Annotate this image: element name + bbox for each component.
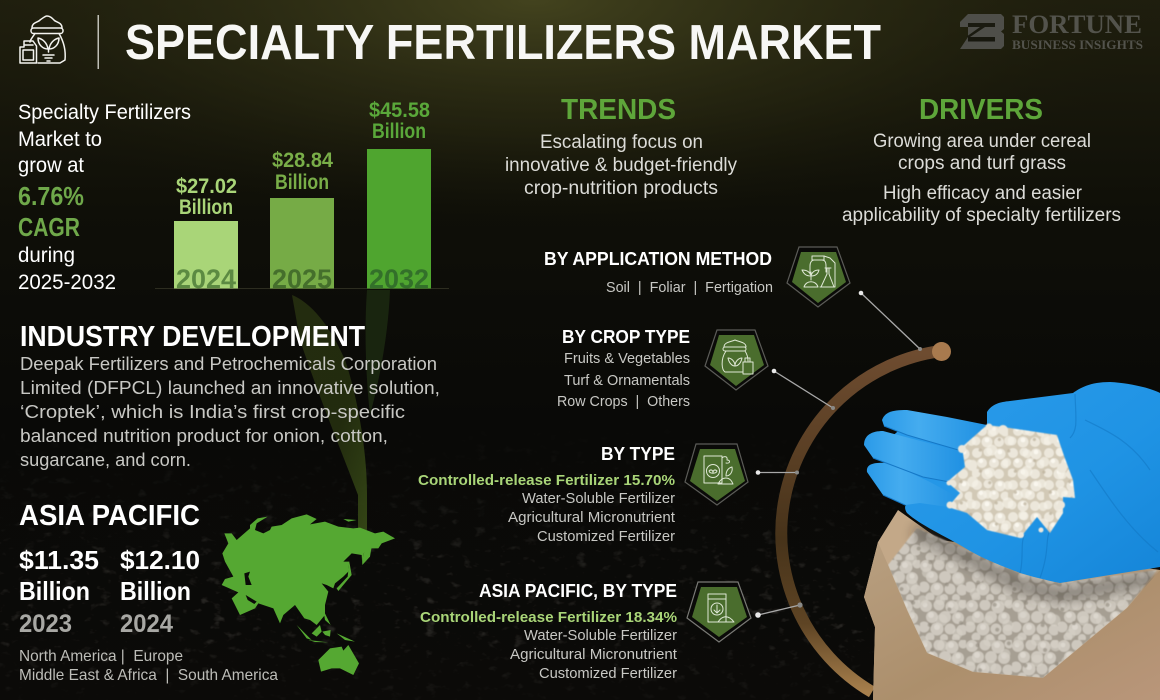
bar 2025 (270, 149, 334, 294)
bar 2025: 2025 (272, 264, 332, 294)
connector: application method (859, 291, 922, 351)
CAGR text block: Market to (18, 128, 102, 151)
bar 2032: Billion (372, 120, 426, 143)
CAGR text block (18, 101, 191, 294)
connector: asia pacific type (755, 602, 803, 618)
segment: by crop type: BY CROP TYPE (562, 327, 690, 347)
text block: drivers: crops and turf grass (898, 153, 1066, 174)
stat: 2024 (120, 545, 200, 638)
connector: type (756, 470, 799, 475)
stat: 2024: Billion (120, 576, 191, 606)
CAGR text block: grow at (18, 154, 84, 177)
map: Asia Pacific (222, 514, 395, 675)
photo: hand holding fertilizer over sack (864, 382, 1160, 700)
segment: by application method (544, 249, 773, 296)
other regions: Middle East & Africa | South America (19, 667, 278, 684)
segment: by crop type: Fruits & Vegetables (564, 350, 690, 367)
segment: by type: BY TYPE (601, 444, 675, 464)
segment: by type: Controlled-release Fertilizer 15.70% (418, 472, 675, 489)
segment: by application method: BY APPLICATION METHOD (544, 249, 772, 269)
stat: 2023: $11.35 (19, 545, 99, 575)
segment: by crop type: Turf & Ornamentals (564, 372, 690, 389)
header icon: fertilizer sack (20, 16, 65, 63)
text block: trends: crop-nutrition products (524, 178, 718, 199)
heading: industry development: INDUSTRY DEVELOPMENT (20, 321, 365, 353)
segment: asia pacific by type: ASIA PACIFIC, BY TYPE (479, 581, 677, 601)
segment: by type: Water-Soluble Fertilizer (522, 490, 675, 507)
CAGR text block: Specialty Fertilizers (18, 101, 191, 124)
header divider (98, 15, 99, 69)
logo: Fortune Business Insights: FORTUNE (1012, 10, 1142, 39)
other regions (19, 648, 278, 684)
icon: application method badge (787, 247, 850, 307)
CAGR text block: CAGR (18, 212, 80, 242)
text block: drivers: Growing area under cereal (873, 131, 1091, 152)
segment: asia pacific by type (420, 581, 678, 682)
text block: development description: Limited (DFPCL) launched an innovative solution, (20, 378, 440, 398)
curved arc (781, 342, 951, 692)
glove (864, 382, 1160, 583)
text block: drivers: applicability of specialty fertilizers (842, 205, 1121, 226)
stat: 2024: 2024 (120, 610, 173, 638)
text block: drivers (842, 131, 1121, 226)
connector: crop type (772, 369, 835, 410)
bar 2032: 2032 (369, 264, 429, 294)
segment: asia pacific by type: Agricultural Micronutrient (510, 646, 678, 663)
text block: trends: Escalating focus on (540, 132, 703, 153)
heading: asia pacific: ASIA PACIFIC (19, 500, 200, 532)
bar 2032: $45.58 (369, 99, 430, 122)
icon: asia pacific type badge (687, 582, 751, 642)
stat: 2024: $12.10 (120, 545, 200, 575)
bar 2025: Billion (275, 171, 329, 194)
text block: development description: balanced nutrition product for onion, cotton, (20, 426, 388, 446)
segment: by application method: Soil | Foliar | Fertigation (606, 279, 773, 296)
logo: Fortune Business Insights: BUSINESS INSIGHTS (1012, 37, 1143, 52)
segment: by crop type: Row Crops | Others (557, 393, 690, 410)
text block: trends (505, 132, 737, 199)
text block: development description: sugarcane, and corn. (20, 450, 191, 470)
text block: development description: Deepak Fertilizers and Petrochemicals Corporation (20, 354, 437, 374)
segment: by type: Agricultural Micronutrient (508, 509, 676, 526)
title: SPECIALTY FERTILIZERS MARKET (125, 16, 881, 70)
stat: 2023: 2023 (19, 610, 72, 638)
logo mark (960, 14, 1004, 49)
stat: 2023 (19, 545, 99, 638)
text block: development description: ‘Croptek’, which is India’s first crop-specific (20, 402, 405, 422)
bar 2024: 2024 (176, 264, 236, 294)
bar 2032 (367, 99, 431, 294)
CAGR text block: during (18, 244, 75, 267)
sack front (864, 542, 1160, 700)
heading: drivers: DRIVERS (919, 94, 1043, 126)
CAGR text block: 2025-2032 (18, 271, 116, 294)
hand pellets (946, 424, 1075, 538)
bar chart (155, 99, 449, 294)
other regions: North America | Europe (19, 648, 183, 665)
bar 2024 (174, 175, 238, 294)
CAGR text block: 6.76% (18, 181, 84, 211)
stat: 2023: Billion (19, 576, 90, 606)
segment: by type: Customized Fertilizer (537, 528, 675, 545)
segment: asia pacific by type: Water-Soluble Fertilizer (524, 627, 677, 644)
heading: trends: TRENDS (561, 94, 676, 126)
logo: Fortune Business Insights (960, 10, 1143, 52)
sack back (864, 510, 1160, 700)
segment: by crop type (557, 327, 690, 410)
icon: type badge (685, 444, 748, 505)
bar 2024: Billion (179, 196, 233, 219)
panel: trends (505, 94, 737, 199)
segment: asia pacific by type: Customized Fertilizer (539, 665, 677, 682)
panel: industry development (20, 321, 440, 470)
panel: drivers (842, 94, 1121, 226)
icon: crop type badge (705, 330, 768, 390)
text block: development description (20, 354, 440, 470)
segment: asia pacific by type: Controlled-release Fertilizer 18.34% (420, 609, 677, 626)
segment: by type (418, 444, 676, 545)
text block: trends: innovative & budget-friendly (505, 155, 737, 176)
bar 2025: $28.84 (272, 149, 333, 172)
panel: asia pacific (19, 500, 278, 684)
text block: drivers: High efficacy and easier (883, 183, 1083, 204)
bar 2024: $27.02 (176, 175, 237, 198)
sack pellets (888, 528, 1157, 678)
